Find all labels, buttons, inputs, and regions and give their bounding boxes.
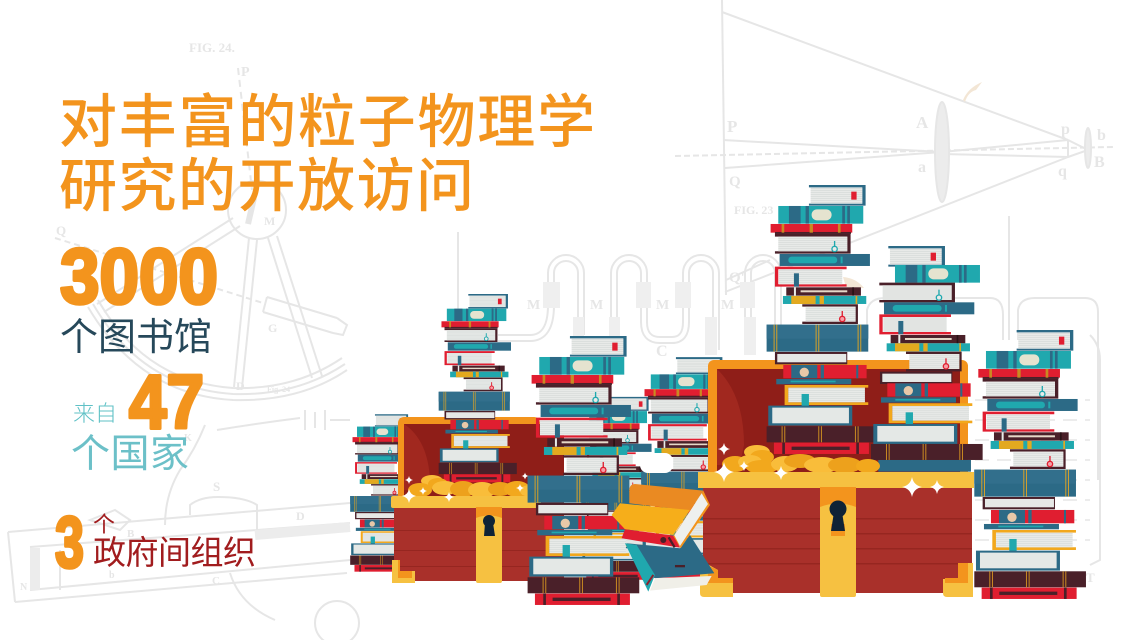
background: U-tube apparatus sketch: Q' [729, 270, 745, 286]
stat: 3 intergovernmental organizations: 个 [93, 512, 115, 537]
stack of books: middle front [528, 336, 639, 605]
tilted blue book [625, 535, 714, 592]
stack of books: behind middle [581, 397, 657, 580]
background: U-tube apparatus sketch: M [721, 298, 734, 313]
background: optics ray diagram sketch: q [1058, 163, 1067, 180]
background: U-tube apparatus sketch [458, 232, 778, 360]
stack of books: inside left chest [439, 294, 517, 482]
background: figure 24 sextant sketch: M [264, 214, 275, 228]
background: figure 24 sextant sketch: Fig. 24 [267, 385, 290, 394]
background: figure 24 sextant sketch: G [268, 321, 277, 335]
stat: 3000 libraries: 个图书馆 [60, 317, 212, 359]
background: optics ray diagram sketch: FIG. 23 [734, 203, 773, 217]
background: optics ray diagram sketch: Q [729, 174, 741, 190]
treasure chest: right, front [698, 472, 974, 597]
stack of books: inside right chest, right [871, 246, 983, 472]
background: electrical bench sketch: B [127, 528, 135, 540]
stat: from 47 countries [71, 360, 204, 476]
background: U-tube apparatus sketch: C [656, 343, 668, 360]
stat: 3 intergovernmental organizations: 3 [55, 503, 84, 583]
background: optics ray diagram sketch: p [1061, 121, 1070, 138]
sparkles [402, 443, 944, 503]
background: electrical bench sketch: C [212, 575, 220, 587]
stack of books: far left [350, 414, 416, 572]
background: figure 24 sextant sketch: P [241, 65, 250, 80]
treasure chest: left, back [398, 417, 564, 507]
stack of books: behind right chest [641, 357, 733, 578]
stat: from 47 countries: 47 [129, 360, 204, 445]
background: optics ray diagram sketch: P [727, 117, 737, 136]
background: electrical bench sketch: K [184, 433, 192, 444]
background: U-tube apparatus sketch: M [527, 298, 540, 313]
coins: left chest [408, 475, 540, 498]
stat: from 47 countries: 个国家 [71, 433, 189, 476]
background: optics ray diagram sketch: A [916, 113, 929, 132]
background: electrical bench sketch [8, 410, 359, 640]
background: optics ray diagram sketch: a [918, 159, 926, 176]
background: U-tube apparatus sketch: M [656, 298, 669, 313]
stat: from 47 countries: 来自 [73, 401, 117, 426]
background: optics ray diagram sketch [675, 0, 1113, 295]
title: 对丰富的粒子物理学 [59, 90, 595, 155]
treasure chest: left, front [391, 496, 564, 583]
coins: right chest [722, 445, 880, 474]
tilted books in front [612, 484, 714, 592]
background: right flask and ruled-sheet sketch: T [1086, 570, 1095, 585]
title: 研究的开放访问 [59, 154, 474, 219]
background: figure 24 sextant sketch: FIG. 24. [189, 40, 235, 55]
background: optics ray diagram sketch: B [1094, 154, 1105, 171]
stat: 3000 libraries: 3000 [60, 232, 218, 320]
title [59, 90, 595, 219]
background: optics ray diagram sketch: b [1097, 127, 1106, 144]
stack of books: inside right chest, left [767, 185, 878, 454]
background: figure 24 sextant sketch: D [236, 379, 245, 393]
background: electrical bench sketch: S [213, 479, 220, 494]
background: electrical bench sketch: N [20, 582, 28, 593]
stat: 3000 libraries [60, 232, 218, 359]
background: U-tube apparatus sketch: M [590, 298, 603, 313]
background: figure 24 sextant sketch: Q [56, 223, 66, 238]
tilted yellow book [612, 484, 710, 548]
stat: 3 intergovernmental organizations [55, 503, 256, 583]
background: right flask and ruled-sheet sketch [867, 216, 1100, 585]
stack of books: far right [974, 330, 1086, 599]
background: figure 24 sextant sketch [55, 40, 347, 400]
background: electrical bench sketch: D [296, 509, 305, 523]
background: electrical bench sketch: b [109, 570, 115, 581]
treasure chest: right, back [708, 360, 968, 485]
stat: 3 intergovernmental organizations: 政府间组织 [93, 534, 256, 571]
